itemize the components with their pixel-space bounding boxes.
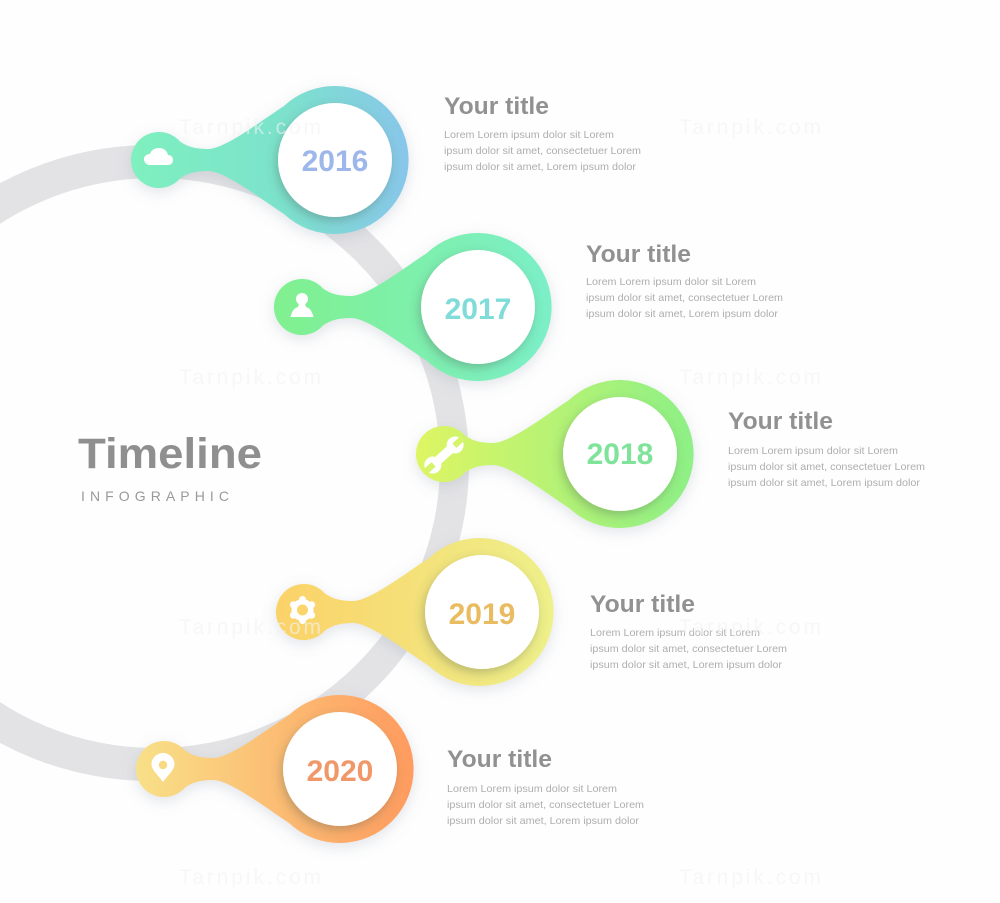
title 2016: Your title [444, 93, 549, 120]
year circle 2018 [563, 397, 677, 511]
icon: gear [290, 596, 315, 624]
teardrop 2020 [136, 695, 414, 843]
body 2017: ipsum dolor sit amet, Lorem ipsum dolor [586, 308, 779, 320]
title 2018: Your title [728, 408, 833, 435]
icon: cloud [144, 148, 173, 165]
icon: map pin [152, 753, 174, 782]
icon: person [290, 293, 314, 317]
teardrop 2017 [274, 233, 552, 381]
text block 2017 [586, 241, 783, 320]
icon: wrench [420, 432, 468, 478]
pin 2017 [274, 233, 552, 381]
body 2020: ipsum dolor sit amet, consectetuer Lorem [447, 799, 644, 811]
year circle 2016 [278, 103, 392, 217]
year circle 2020 [283, 712, 397, 826]
year circle 2017 [421, 250, 535, 364]
body 2016: ipsum dolor sit amet, Lorem ipsum dolor [444, 161, 637, 173]
body 2019: ipsum dolor sit amet, Lorem ipsum dolor [590, 659, 783, 671]
pin 2018 [416, 380, 694, 528]
body 2018: Lorem Lorem ipsum dolor sit Lorem [728, 445, 898, 457]
body 2017: ipsum dolor sit amet, consectetuer Lorem [586, 292, 783, 304]
text block 2016 [444, 93, 641, 173]
pin 2019 [276, 538, 554, 686]
watermarks: Tarnpik.com [679, 616, 821, 639]
text block 2020 [447, 746, 644, 827]
year circle 2019 [425, 555, 539, 669]
body 2019: Lorem Lorem ipsum dolor sit Lorem [590, 627, 760, 639]
body 2017 [586, 276, 783, 320]
year 2019: 2019 [449, 598, 515, 631]
body 2019 [590, 627, 787, 671]
pin 2016 [131, 86, 409, 234]
text block 2018 [728, 408, 925, 489]
body 2020: Lorem Lorem ipsum dolor sit Lorem [447, 783, 617, 795]
body 2020 [447, 783, 644, 827]
heading: Timeline: Timeline [78, 430, 262, 478]
watermarks: Tarnpik.com [679, 116, 821, 139]
body 2018 [728, 445, 925, 489]
watermarks [179, 116, 821, 889]
subheading: Infographic: INFOGRAPHIC [81, 488, 229, 504]
teardrop 2016 [131, 86, 409, 234]
body 2020: ipsum dolor sit amet, Lorem ipsum dolor [447, 815, 640, 827]
title 2020: Your title [447, 746, 552, 773]
text block 2019 [590, 591, 787, 671]
teardrop 2018 [416, 380, 694, 528]
watermarks: Tarnpik.com [679, 366, 821, 389]
watermarks: Tarnpik.com [179, 366, 321, 389]
year 2018: 2018 [587, 438, 653, 471]
title 2019: Your title [590, 591, 695, 618]
body 2017: Lorem Lorem ipsum dolor sit Lorem [586, 276, 756, 288]
body 2016 [444, 129, 641, 173]
watermarks: Tarnpik.com [679, 866, 821, 889]
body 2019: ipsum dolor sit amet, consectetuer Lorem [590, 643, 787, 655]
year 2016: 2016 [302, 145, 368, 178]
body 2016: ipsum dolor sit amet, consectetuer Lorem [444, 145, 641, 157]
watermarks: Tarnpik.com [179, 116, 321, 139]
year 2017: 2017 [445, 293, 511, 326]
title 2017: Your title [586, 241, 691, 268]
body 2018: ipsum dolor sit amet, Lorem ipsum dolor [728, 477, 921, 489]
body 2016: Lorem Lorem ipsum dolor sit Lorem [444, 129, 614, 141]
body 2018: ipsum dolor sit amet, consectetuer Lorem [728, 461, 925, 473]
pin 2020 [136, 695, 414, 843]
year 2020: 2020 [307, 755, 373, 788]
watermarks: Tarnpik.com [179, 866, 321, 889]
timeline ring [0, 145, 469, 781]
watermarks: Tarnpik.com [179, 616, 321, 639]
teardrop 2019 [276, 538, 554, 686]
